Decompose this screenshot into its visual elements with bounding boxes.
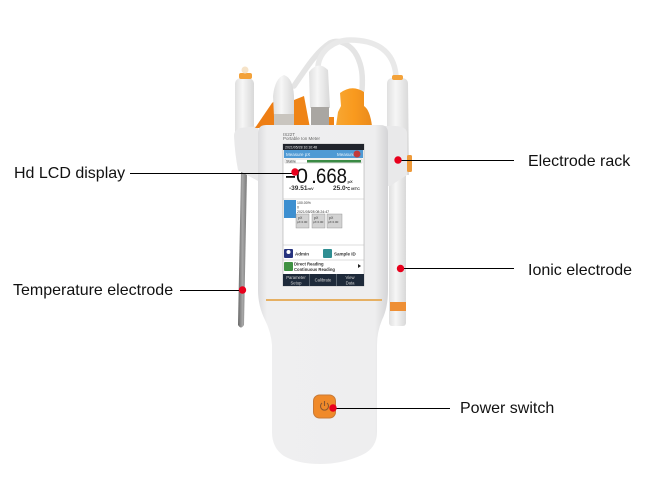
callout: Power switch <box>329 400 554 417</box>
calibration info: pX <box>298 216 303 220</box>
power button <box>314 395 336 418</box>
calibration info <box>283 199 364 260</box>
calibration info: 100.00% <box>297 201 311 205</box>
callout: Power switch: Power switch <box>460 400 554 417</box>
LCD screen <box>283 144 364 286</box>
sensor connectors <box>273 65 330 126</box>
title bar: Measure pX <box>286 152 310 157</box>
calibration info: pX <box>329 216 334 220</box>
stable bar: Stable <box>286 160 296 164</box>
cables <box>294 40 396 90</box>
accent line <box>266 299 382 301</box>
reading mode row: Direct Reading <box>294 262 324 266</box>
callout: Electrode rack <box>394 153 631 170</box>
bottom buttons: Calibrate <box>315 278 332 282</box>
callout: Hd LCD display <box>14 165 299 182</box>
orange electrode caps <box>255 88 372 128</box>
bottom buttons: Setup <box>291 280 302 286</box>
potential and temperature <box>289 185 360 192</box>
electrode rack <box>380 75 412 186</box>
title bar: Measure <box>337 152 355 157</box>
callout: Ionic electrode <box>397 262 632 279</box>
admin and sample row: Admin <box>295 252 309 256</box>
bottom buttons <box>283 274 364 286</box>
admin and sample row: Sample ID <box>334 252 357 256</box>
calibration info: pX <box>314 216 319 220</box>
callout: Electrode rack: Electrode rack <box>528 153 631 170</box>
calibration info: pX 0.00 <box>313 220 324 224</box>
calibration info: pX 0.00 <box>328 220 339 224</box>
callout: Hd LCD display: Hd LCD display <box>14 165 125 182</box>
calibration info: pX 0.00 <box>297 220 308 224</box>
calibration info: 0 <box>297 206 299 210</box>
ionic electrode <box>389 130 406 326</box>
main reading: 0 <box>296 164 308 188</box>
calibration info: 2021/05/28 08:24:47 <box>297 210 329 214</box>
status bar <box>283 144 364 150</box>
temperature probe <box>234 66 258 328</box>
main reading: . <box>311 164 317 188</box>
bottom buttons: Parameter <box>286 275 306 280</box>
meter body <box>258 125 388 464</box>
potential and temperature: -39.51mV <box>289 185 314 192</box>
reading mode row: Continuous Reading <box>294 267 335 272</box>
main reading <box>286 164 347 188</box>
stable bar <box>285 159 362 164</box>
bottom buttons: Data <box>346 280 355 286</box>
callout: Ionic electrode: Ionic electrode <box>528 262 632 279</box>
model label: IS22T <box>283 132 295 137</box>
potential and temperature: 25.0℃ MTC <box>333 185 360 192</box>
bottom buttons: View <box>345 275 355 280</box>
status bar: 2021/05/28 10:10:48 <box>285 146 317 150</box>
title bar <box>284 150 363 158</box>
callout: Temperature electrode: Temperature electrode <box>13 282 173 299</box>
model label <box>283 132 321 141</box>
model label: Portable Ion Meter <box>283 136 321 141</box>
callout: Temperature electrode <box>13 282 246 299</box>
reading mode row <box>284 262 361 272</box>
LCD screen: pX <box>348 179 353 184</box>
main reading: 668 <box>316 164 347 188</box>
admin and sample row <box>284 249 357 258</box>
